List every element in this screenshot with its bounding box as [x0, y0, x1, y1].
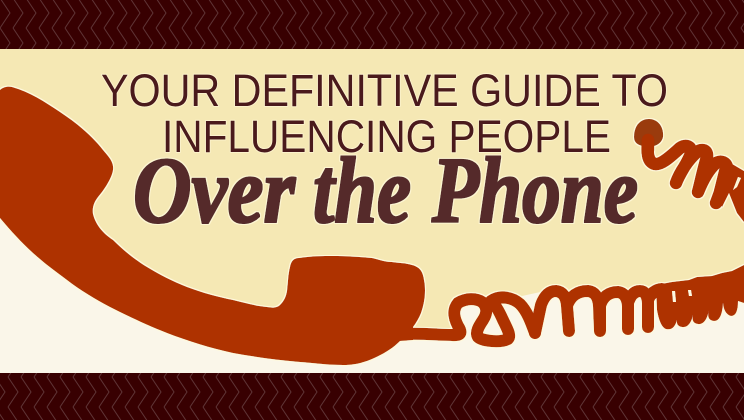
upper cord dense coil mass	[714, 158, 744, 222]
script title: Over the Phone	[133, 139, 638, 243]
cord plug inner wire	[642, 140, 654, 150]
lower cord: dense coil mass	[656, 265, 744, 329]
cream background panel	[0, 49, 744, 374]
script title: Over the Phone: Phone	[431, 139, 638, 243]
off-white lower background area	[0, 218, 744, 373]
script title: Over the Phone: Over	[133, 139, 296, 243]
cord plug	[634, 119, 663, 146]
lower cord: coil tines	[535, 289, 662, 333]
bottom chevron band	[0, 373, 744, 420]
handset	[0, 87, 425, 365]
title line 2: INFLUENCING PEOPLE	[162, 111, 611, 162]
illustration: red telephone handset and coiled cord	[0, 87, 744, 365]
title line 1: YOUR DEFINITIVE GUIDE TO	[101, 65, 668, 116]
top chevron band	[0, 0, 744, 49]
upper cord coil	[648, 140, 727, 203]
lower cord: loop and triangle coil	[405, 297, 535, 341]
script title: Over the Phone: the	[313, 139, 411, 243]
